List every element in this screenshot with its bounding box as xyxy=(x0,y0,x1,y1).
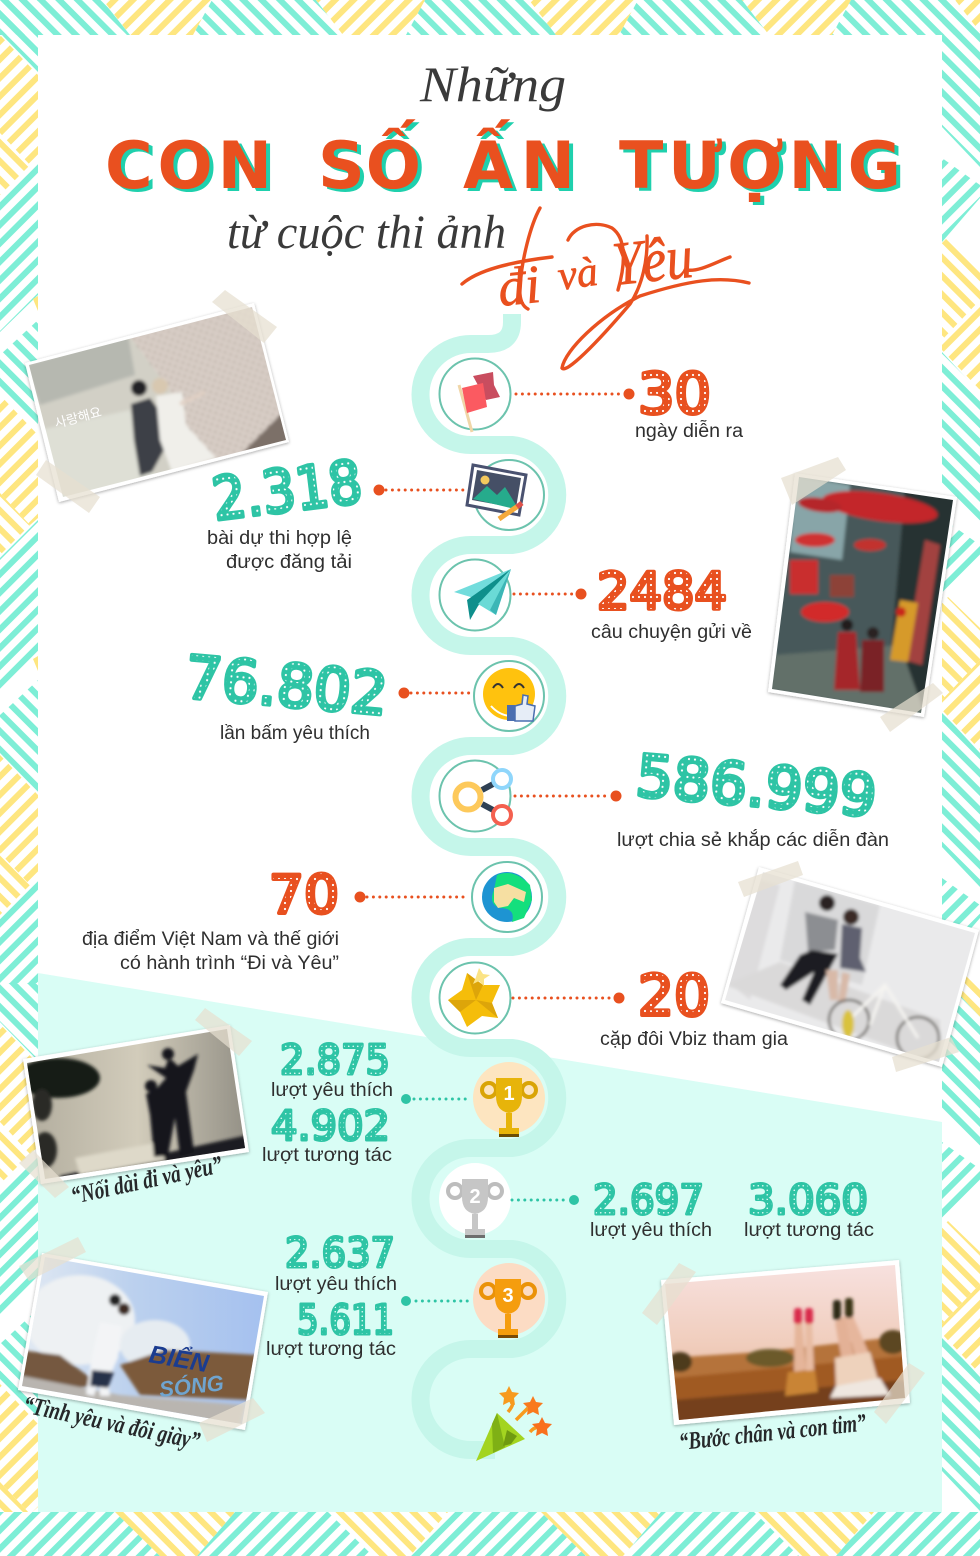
connector xyxy=(512,1198,567,1202)
label: cặp đôi Vbiz tham gia xyxy=(600,1029,788,1050)
number 2.697: 2.697 xyxy=(593,1176,704,1224)
label xyxy=(82,929,339,974)
caption: Bước chân và con tim: “Bước chân và con tim” xyxy=(678,1409,868,1456)
icon: party popper xyxy=(476,1386,552,1461)
title: CON SỐ ẤN TƯỢNG xyxy=(105,118,901,204)
photo: couple with bicycle xyxy=(720,860,980,1072)
label: lượt tương tác xyxy=(262,1145,392,1166)
contest logo: Đi và Yêu: Yêu xyxy=(609,223,696,299)
number 2.637: 2.637 xyxy=(285,1229,395,1277)
label: lượt yêu thích xyxy=(271,1080,393,1101)
number 2.318: 2.318 xyxy=(208,447,366,534)
number 3.060: 3.060 xyxy=(748,1176,868,1224)
label: lượt tương tác xyxy=(744,1220,874,1241)
number 5.611: 5.611 xyxy=(297,1296,394,1344)
label: địa điểm Việt Nam và thế giới xyxy=(82,929,339,950)
connector xyxy=(367,896,467,898)
number 2484: 2484 xyxy=(597,563,727,622)
number 586.999: 586.999 xyxy=(633,742,879,830)
subtitle: từ cuộc thi ảnh: từ cuộc thi ảnh xyxy=(227,206,506,259)
icon: silver trophy: 2 xyxy=(469,1186,481,1208)
connector xyxy=(515,794,610,798)
photo: wedding couple xyxy=(20,290,300,513)
label xyxy=(207,528,352,573)
connector xyxy=(414,1098,470,1100)
label: bài dự thi hợp lệ xyxy=(207,528,352,549)
prize 1 xyxy=(262,1036,545,1166)
icon: gold trophy xyxy=(473,1062,545,1137)
prize 3 xyxy=(266,1229,545,1360)
connector xyxy=(416,1300,472,1302)
contest logo: Đi và Yêu xyxy=(462,208,749,369)
label: lượt chia sẻ khắp các diễn đàn xyxy=(617,829,889,851)
number 30: 30 xyxy=(638,362,711,427)
photo: red umbrella alley xyxy=(760,457,960,732)
contest logo: Đi và Yêu: và xyxy=(555,249,601,300)
number 70: 70 xyxy=(269,865,339,926)
photo: family silhouette xyxy=(16,1008,255,1198)
connector xyxy=(514,592,574,596)
photo: couple on the beach: SÓNG xyxy=(158,1370,225,1402)
icon: bronze trophy: 3 xyxy=(502,1285,514,1307)
title: CON SỐ ẤN TƯỢNG: ẤN xyxy=(463,118,575,204)
caption: Nối dài đi và yêu: “Nối dài đi và yêu” xyxy=(69,1151,225,1210)
connector xyxy=(513,996,612,1000)
title: CON SỐ ẤN TƯỢNG: CON xyxy=(105,129,272,204)
photo overlay text: BIỂN xyxy=(147,1339,212,1378)
label: có hành trình “Đi và Yêu” xyxy=(120,953,339,974)
step 6: 70 locations xyxy=(82,862,542,974)
icon: bronze trophy xyxy=(473,1263,545,1338)
icon: paper plane xyxy=(440,560,511,630)
step 7: 20 Vbiz couples xyxy=(440,962,788,1050)
icon: gold trophy: 1 xyxy=(503,1083,515,1105)
connector xyxy=(516,392,622,396)
icon: share nodes xyxy=(440,760,511,832)
icon: silver trophy xyxy=(439,1163,511,1238)
photo: couple on the beach xyxy=(15,1237,270,1442)
prize 2 xyxy=(439,1163,874,1241)
label: được đăng tải xyxy=(226,552,352,573)
contest logo: Đi và Yêu: đi xyxy=(495,254,543,318)
icon: gold star xyxy=(440,962,510,1034)
step 5: 586.999 shares xyxy=(440,742,889,851)
number 2.875: 2.875 xyxy=(280,1036,390,1084)
label: lượt yêu thích xyxy=(275,1274,397,1295)
step 2: 2.318 entries xyxy=(207,447,544,573)
icon: picture with pencil xyxy=(467,460,544,530)
mint lower background panel xyxy=(38,973,942,1512)
label: lượt yêu thích xyxy=(590,1220,712,1241)
number 4.902: 4.902 xyxy=(271,1102,390,1150)
title: CON SỐ ẤN TƯỢNG: TƯỢNG xyxy=(619,129,901,204)
title: CON SỐ ẤN TƯỢNG: SỐ xyxy=(318,118,421,204)
icon: flag xyxy=(440,358,510,432)
icon: smiley with thumbs up xyxy=(474,661,544,731)
step 3: 2484 stories xyxy=(440,560,752,643)
number 76.802: 76.802 xyxy=(182,642,391,729)
label: câu chuyện gửi về xyxy=(591,622,752,643)
serpentine timeline path xyxy=(420,314,557,1450)
photo overlay text: 사랑해요 xyxy=(53,404,103,431)
number 20: 20 xyxy=(638,964,710,1029)
icon: globe xyxy=(472,862,542,932)
label: lần bấm yêu thích xyxy=(220,723,370,744)
step 4: 76.802 likes xyxy=(182,642,544,744)
step 1: 30 days xyxy=(440,358,743,442)
label: lượt tương tác xyxy=(266,1339,396,1360)
connector xyxy=(386,488,468,492)
label: ngày diễn ra xyxy=(635,420,743,442)
connector xyxy=(411,692,470,694)
caption: Tình yêu và đôi giày: “Tình yêu và đôi giày” xyxy=(21,1391,203,1455)
title: Những: Những xyxy=(419,56,566,112)
photo: feet in the field xyxy=(642,1260,925,1430)
